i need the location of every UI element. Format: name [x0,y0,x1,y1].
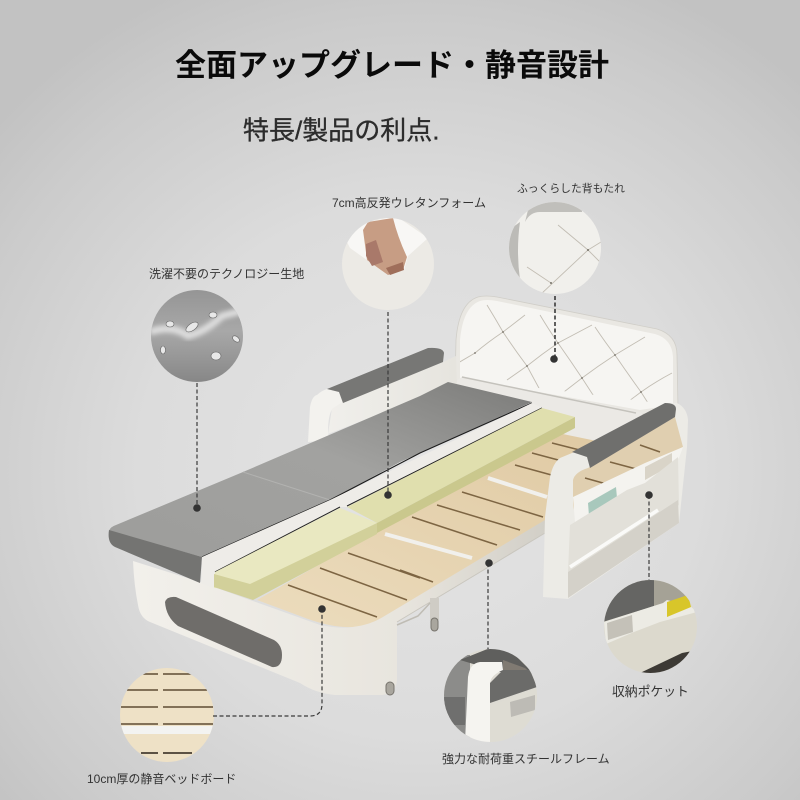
callout: steel frame [442,559,610,766]
wooden slats [257,432,640,627]
gray seat cushion [109,382,532,583]
callout: fabric [149,267,304,512]
callout: slat board: 10cm厚の静音ベッドボード [87,772,236,786]
subtitle: 特長/製品の利点. [243,116,439,146]
yellow foam [214,408,575,600]
side handle [165,597,282,667]
callout: fabric: 洗濯不要のテクノロジー生地 [149,267,304,281]
callout: steel frame: 強力な耐荷重スチールフレーム [442,752,610,766]
backrest [455,296,678,416]
title: 全面アップグレード・静音設計 [175,48,609,83]
callout: slat board [87,605,326,786]
callout: foam: 7cm高反発ウレタンフォーム [332,196,486,210]
callout: backrest: ふっくらした背もたれ [517,181,625,195]
white foam layer [201,403,542,588]
casters and leg [386,598,439,695]
magazines in pocket [588,487,617,516]
callout: backrest [509,181,625,363]
callout: storage pocket: 収納ポケット [612,684,689,699]
right armrest and pocket [543,403,688,599]
back rail [452,377,662,452]
callout: storage pocket [603,491,698,699]
front frame [133,520,545,695]
sofa bed illustration [109,296,688,695]
callout: foam [332,196,486,499]
left armrest [308,348,457,442]
